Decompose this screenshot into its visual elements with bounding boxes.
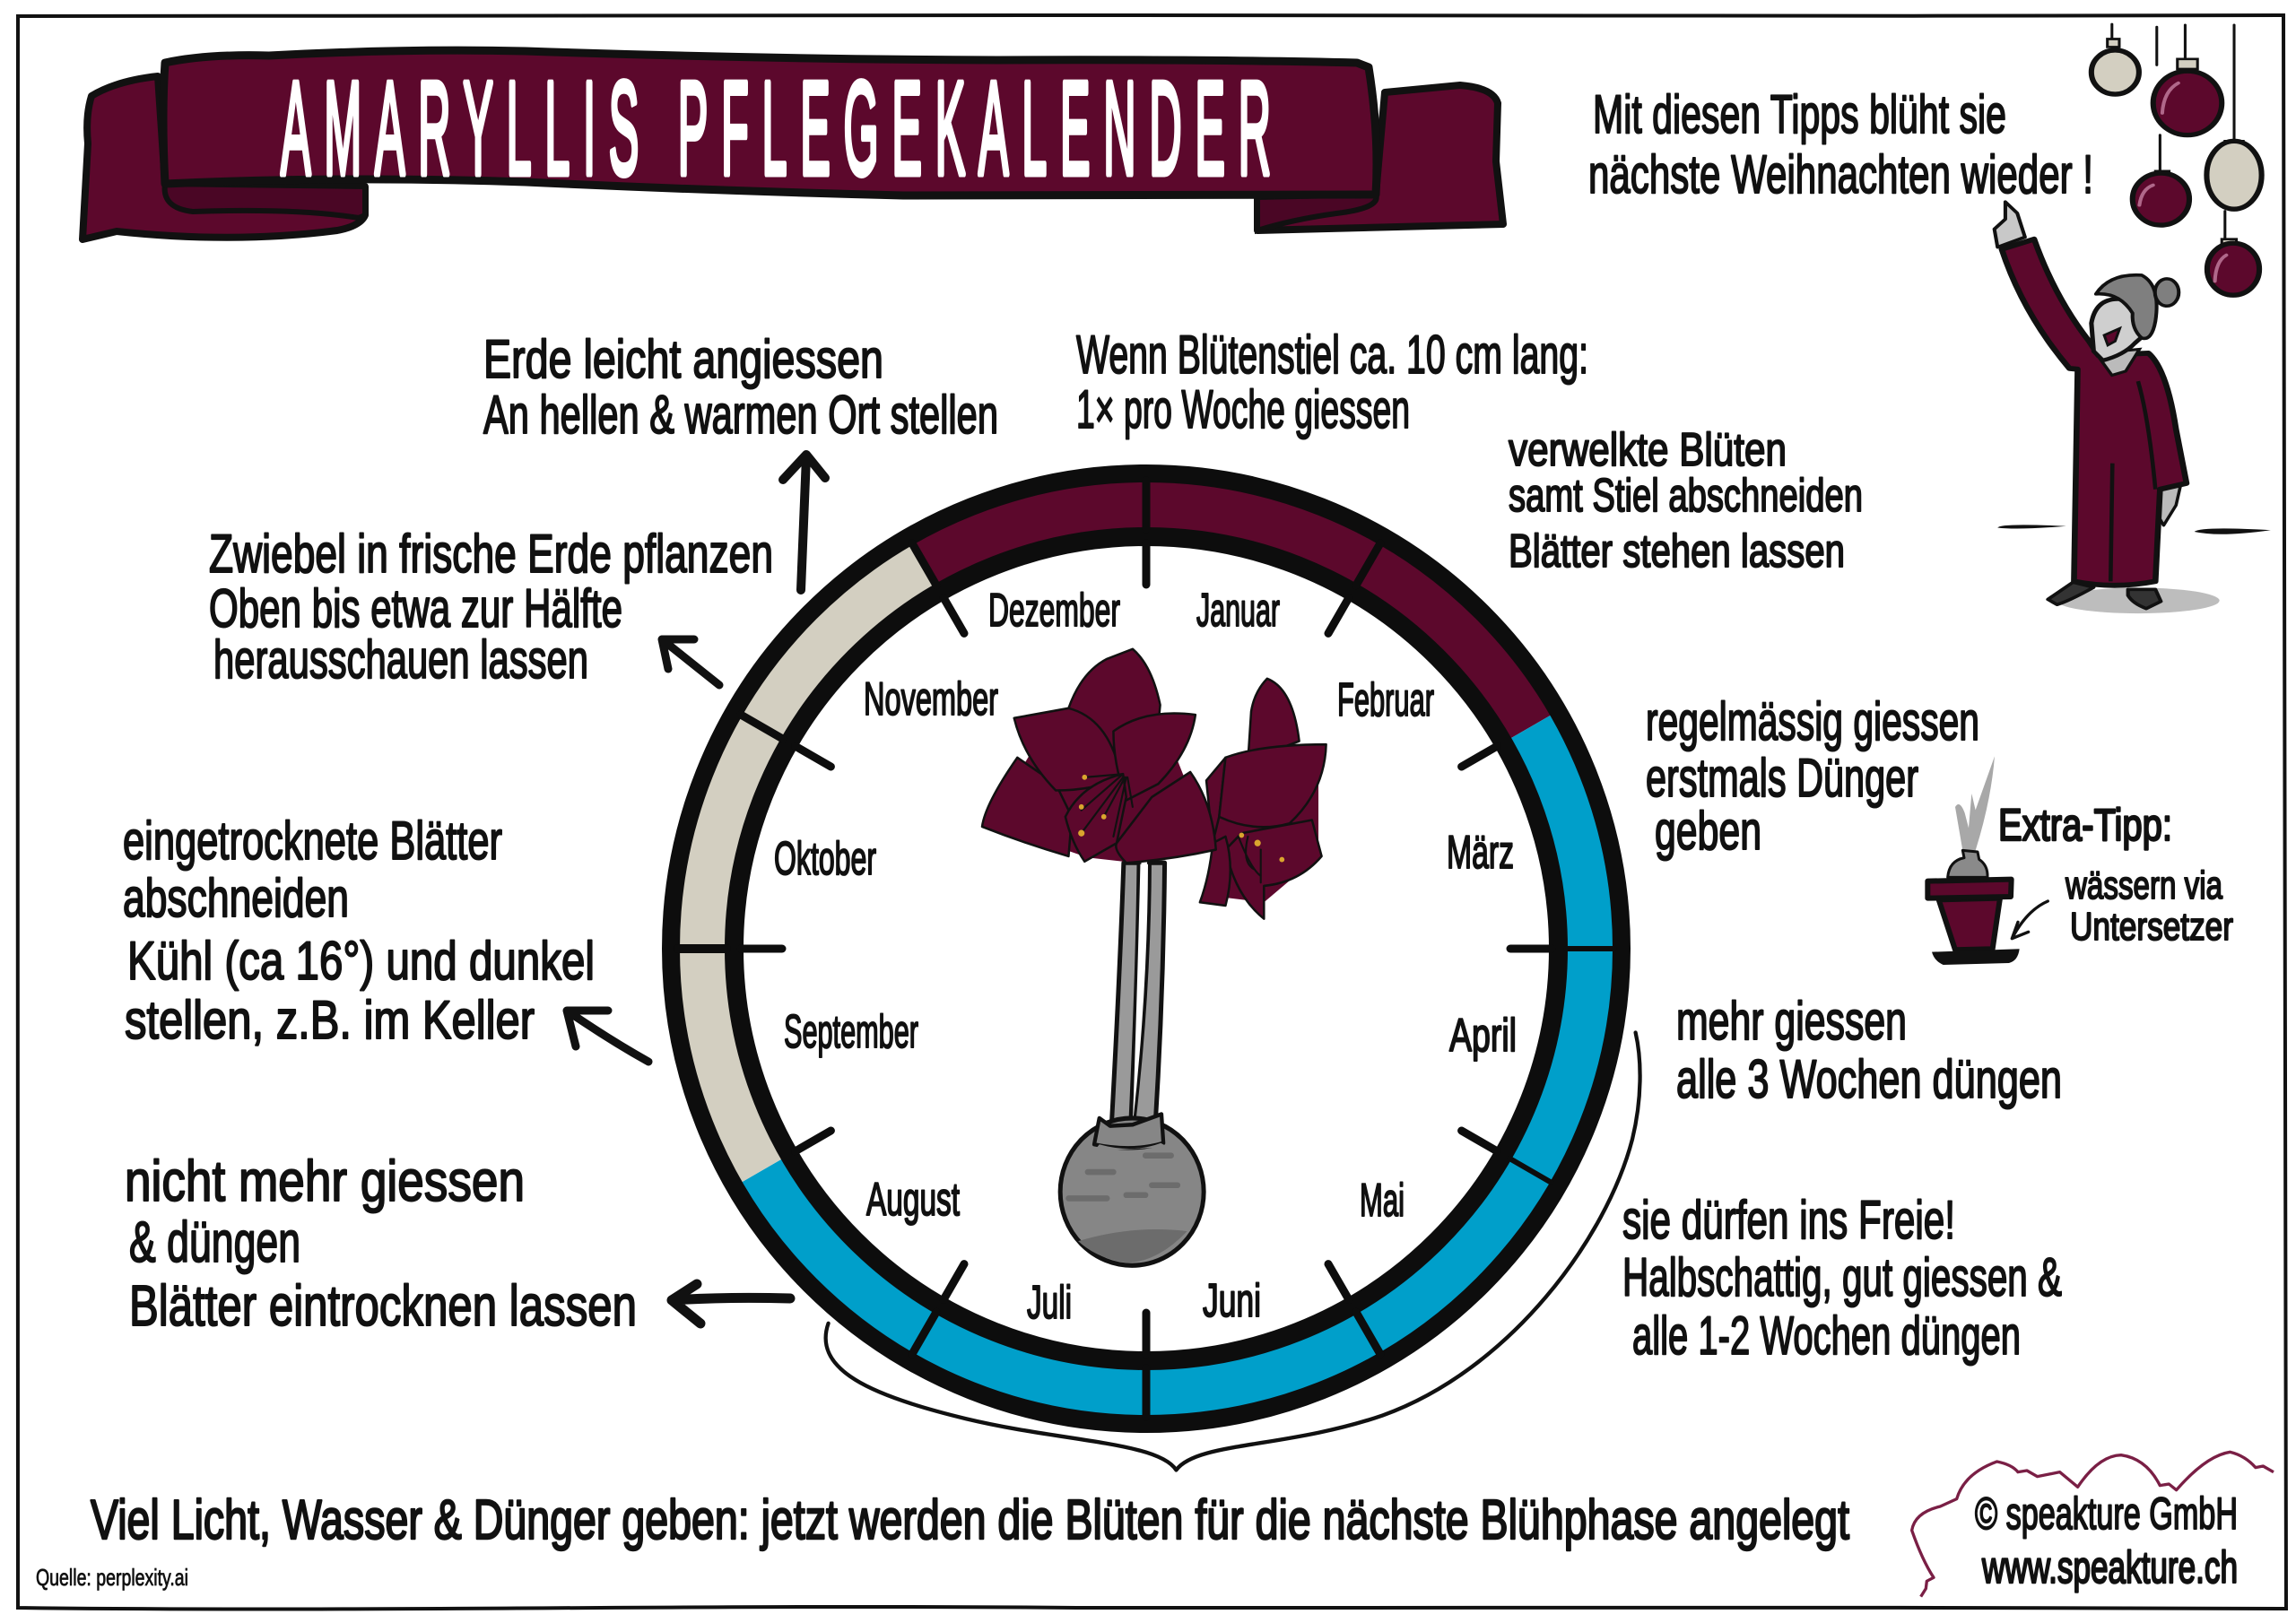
text block: Wenn Blütenstiel: Wenn Blütenstiel ca. 10 cm lang:: [1076, 325, 1588, 385]
arrow: August to text: [672, 1284, 790, 1324]
month labels: Februar: [1337, 674, 1434, 726]
face: [2092, 299, 2151, 360]
title: AMARYLLIS PFLEGEKALENDER: [281, 55, 1271, 203]
pot body: [1939, 898, 2000, 950]
banner main: [163, 50, 1377, 195]
text block: Zwiebel pflanzen: Zwiebel in frische Erde pflanzen: [209, 524, 773, 584]
pot rim: [1927, 880, 2012, 898]
ornament maroon large: [2153, 71, 2222, 135]
banner left fold: [165, 184, 365, 218]
banner right tail: [1257, 85, 1503, 230]
text block: verwelkte Blüten: [1509, 424, 1863, 577]
month labels: September: [784, 1006, 918, 1058]
second flower: [1200, 679, 1326, 919]
intro text: [1588, 84, 2093, 204]
neck: [2096, 349, 2139, 375]
ticks: [678, 481, 1614, 1417]
text block: verwelkte Blüten: Blätter stehen lassen: [1509, 525, 1845, 577]
ornament highlights: [2139, 83, 2226, 282]
wheel outer ring: [671, 473, 1622, 1424]
month labels: November: [864, 673, 998, 725]
text block: eingetrocknete Blätter: stellen, z.B. im Keller: [125, 990, 535, 1050]
main flower: [982, 649, 1216, 863]
shoes: [2048, 582, 2161, 609]
shadow: [2057, 587, 2220, 613]
band: flowering season maroon: [924, 505, 1531, 726]
text block: Zwiebel pflanzen: herausschauen lassen: [213, 629, 588, 690]
text block: sie dürfen ins Freie: [1622, 1190, 2062, 1366]
month labels: Mai: [1360, 1175, 1405, 1227]
source note: Quelle: perplexity.ai: [36, 1564, 188, 1591]
text block: Wenn Blütenstiel: [1076, 325, 1588, 439]
text block: sie dürfen ins Freie: Halbschattig, gut giessen &: [1622, 1247, 2062, 1307]
text block: mehr giessen: alle 3 Wochen düngen: [1676, 1049, 2062, 1109]
month labels: Dezember: [988, 585, 1120, 637]
arrow: Oct/Nov to text: [662, 639, 719, 685]
text block: Erde leicht angiessen: [483, 329, 998, 445]
illustration: person pointing up: [1995, 202, 2271, 613]
text block: eingetrocknete Blätter: eingetrocknete Blätter: [123, 811, 502, 871]
month labels: Januar: [1196, 585, 1280, 637]
intro text: Mit diesen Tipps blüht sie: [1593, 84, 2006, 144]
text block: regelmässig giessen: erstmals Dünger: [1646, 748, 1918, 808]
text block: mehr giessen: [1676, 991, 2062, 1109]
banner right fold: [1257, 195, 1377, 230]
illustration: amaryllis plant: [826, 649, 1640, 1470]
month labels: August: [866, 1174, 960, 1226]
ornament caps: [2108, 39, 2243, 247]
hand lower: [2155, 485, 2180, 525]
icon: extra tip pot: [1927, 756, 2048, 965]
text block: nicht mehr giessen: [125, 1149, 637, 1338]
body inner folds: [2110, 381, 2155, 581]
hair: [2096, 275, 2157, 338]
text block: eingetrocknete Blätter: Kühl (ca 16°) und dunkel: [127, 931, 595, 991]
text block: eingetrocknete Blätter: abschneiden: [123, 868, 349, 928]
ornament cream large: [2206, 141, 2262, 209]
sprout leaves: [1955, 756, 1995, 850]
text block: Zwiebel pflanzen: Oben bis etwa zur Hälfte: [209, 578, 622, 638]
arrow: November to text: [783, 455, 825, 590]
small bulb: [1948, 850, 1987, 877]
ornament maroon small: [2207, 243, 2259, 295]
band: rest season beige: [702, 564, 924, 1171]
ornament cream small: [2092, 50, 2139, 94]
arrow: September to text: [567, 1011, 648, 1062]
text block: regelmässig giessen: regelmässig giessen: [1646, 691, 1979, 751]
month labels: März: [1447, 827, 1514, 879]
body: [2002, 239, 2187, 586]
brace under wheel: [826, 1033, 1640, 1470]
text block: mehr giessen: mehr giessen: [1676, 991, 1907, 1051]
text block: regelmässig giessen: [1646, 691, 1979, 861]
band: growth season blue: [761, 726, 1590, 1393]
text block: Wenn Blütenstiel: 1× pro Woche giessen: [1076, 379, 1410, 439]
text block: Zwiebel pflanzen: [209, 524, 773, 690]
bulb: [1060, 1115, 1204, 1265]
text block: regelmässig giessen: geben: [1655, 801, 1761, 861]
month labels: Oktober: [774, 833, 876, 885]
illustration: ornaments: [2092, 24, 2262, 295]
text block: Erde leicht angiessen: An hellen & warmen Ort stellen: [483, 385, 998, 445]
ground dashes: [1997, 525, 2271, 534]
text block: Erde leicht angiessen: Erde leicht angiessen: [483, 329, 883, 389]
text block: sie dürfen ins Freie: alle 1-2 Wochen düngen: [1632, 1306, 2021, 1366]
text block: sie dürfen ins Freie: sie dürfen ins Freie!: [1622, 1190, 1955, 1250]
ornament maroon mid: [2133, 173, 2189, 225]
stems: [1111, 863, 1165, 1129]
month labels: Juli: [1027, 1277, 1072, 1329]
text block: verwelkte Blüten: verwelkte Blüten: [1509, 424, 1787, 476]
hand raised: [1995, 202, 2025, 247]
text block: nicht mehr giessen: & düngen: [129, 1210, 300, 1274]
banner left tail: [83, 76, 365, 239]
ornament strings: [2112, 24, 2234, 239]
month labels: April: [1449, 1010, 1517, 1062]
text block: nicht mehr giessen: nicht mehr giessen: [125, 1149, 525, 1213]
text block: verwelkte Blüten: samt Stiel abschneiden: [1509, 470, 1863, 522]
extra tip heading: Extra-Tipp:: [1998, 800, 2172, 850]
saucer: [1932, 949, 2020, 965]
calendar wheel: [671, 473, 1622, 1424]
tip arrow: [2012, 901, 2048, 939]
wheel inner ring: [734, 536, 1559, 1361]
extra tip text: wässern via: [2065, 864, 2222, 907]
extra tip text: [2065, 864, 2233, 949]
intro text: nächste Weihnachten wieder !: [1588, 144, 2093, 204]
month labels: Juni: [1203, 1275, 1261, 1327]
text block: eingetrocknete Blätter: [123, 811, 595, 1050]
title banner: [83, 50, 1503, 239]
extra tip text: Untersetzer: [2070, 905, 2233, 949]
text block: nicht mehr giessen: Blätter eintrocknen lassen: [129, 1273, 637, 1338]
hair bun: [2155, 279, 2179, 306]
copyright text: [1975, 1488, 2238, 1593]
logo: cloud outline: [1912, 1452, 2274, 1597]
mouth: [2104, 328, 2119, 345]
month labels: [774, 585, 1517, 1329]
